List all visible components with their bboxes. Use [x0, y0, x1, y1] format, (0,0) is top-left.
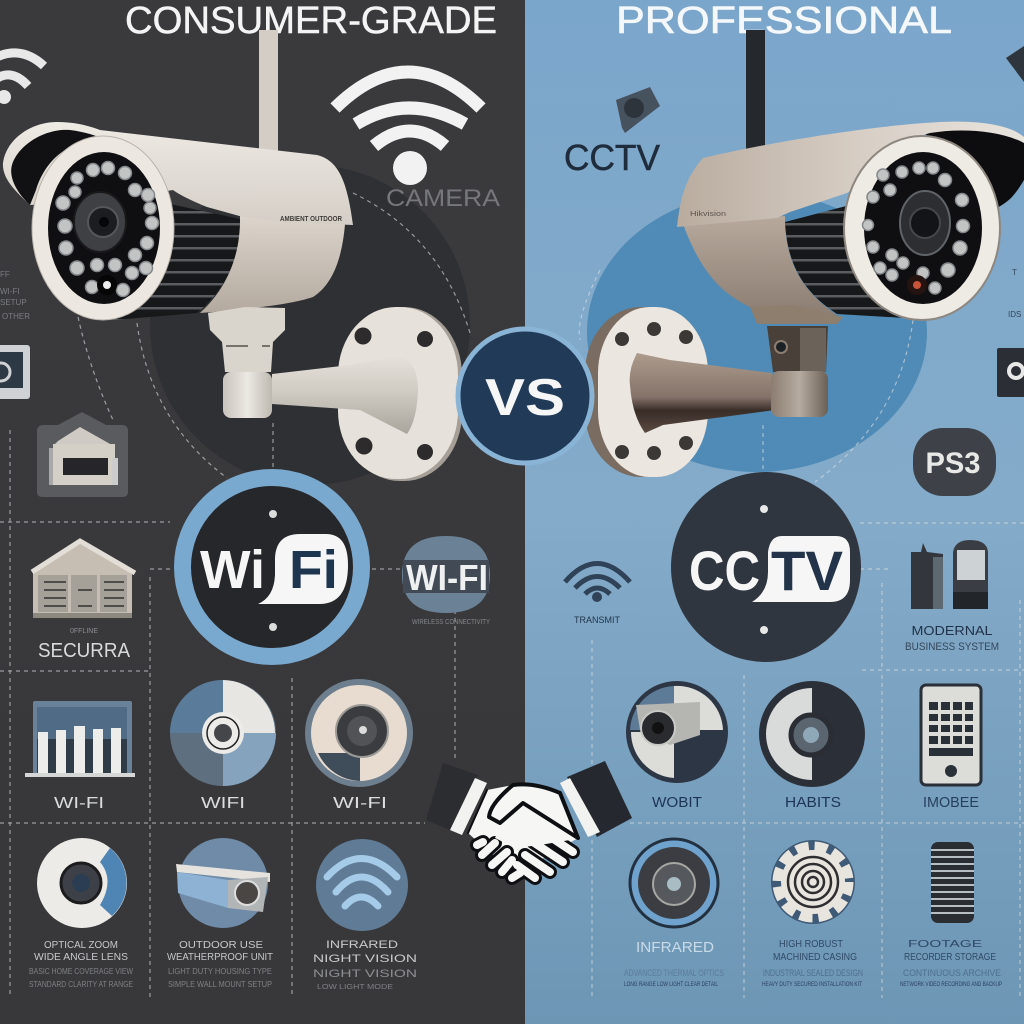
label: camera: CAMERA [386, 185, 500, 212]
right camera [677, 30, 1024, 320]
LEDs [862, 162, 970, 294]
vs badge: VS [485, 369, 565, 427]
caption [167, 940, 273, 989]
caption: INFRARED [636, 939, 714, 956]
lens [900, 191, 950, 255]
icon: wifi large [335, 72, 481, 185]
panel: cctv circle: CC [689, 539, 760, 602]
plate [342, 307, 462, 481]
badge: wi-fi [402, 536, 490, 613]
left mount [208, 307, 462, 481]
title: consumer-grade: CONSUMER-GRADE [125, 0, 497, 42]
label: wifi small right: TRANSMIT [574, 615, 620, 625]
neck [208, 307, 285, 372]
caption: INFRARED [326, 939, 398, 951]
icon: corner right [1006, 46, 1024, 82]
left text block fragments: OTHER [2, 312, 30, 321]
caption [29, 940, 133, 989]
right fingers fill [477, 832, 573, 878]
left text block fragments: FF [0, 270, 10, 279]
lens [74, 192, 126, 252]
hood interior [925, 127, 1024, 215]
label: WI-FI [333, 795, 387, 812]
label: industrial: MODERNAL [912, 623, 992, 638]
right cuff band [560, 778, 600, 837]
right hand top and thumb [489, 784, 578, 838]
right fingers outline [477, 832, 573, 878]
icon: gear lens [771, 840, 855, 924]
label: HABITS [785, 794, 841, 811]
maker text: Hikvision [690, 211, 726, 218]
maker text: AMBIENT OUTDOOR [280, 216, 342, 223]
bolts [354, 328, 372, 344]
panel: consumer-grade background [0, 0, 525, 1024]
label: security: SECURRA [38, 640, 131, 662]
icon: wifi disc [316, 839, 408, 931]
label: WIFI [201, 795, 245, 812]
title: professional: PROFESSIONAL [616, 0, 952, 42]
caption: LOW LIGHT MODE [317, 984, 393, 991]
caption: ADVANCED THERMAL OPTICS [624, 968, 724, 978]
right mount [585, 305, 843, 477]
icon: dial [170, 680, 276, 786]
panel: cctv circle [671, 472, 861, 662]
fins [113, 204, 240, 320]
caption: RECORDER STORAGE [904, 952, 996, 963]
right side fragments: IDS [1008, 310, 1021, 319]
joint [771, 371, 828, 417]
right side fragments [1008, 268, 1021, 319]
left cuff [426, 763, 478, 832]
bracket [750, 305, 843, 324]
hood [3, 122, 353, 225]
left hand [468, 785, 578, 865]
icon: small camera right [616, 87, 660, 133]
label: IMOBEE [923, 794, 979, 811]
caption: FOOTAGE [908, 939, 982, 950]
sublabel: industrial: BUSINESS SYSTEM [905, 641, 999, 653]
badge: ps3 [913, 428, 996, 496]
badge: wi-fi: WI-FI [406, 557, 488, 598]
label: cctv: CCTV [564, 137, 660, 178]
icon: servers [911, 540, 988, 609]
icon: lens [305, 679, 413, 787]
arm [630, 353, 775, 433]
caption [313, 939, 417, 991]
caption: WEATHERPROOF UNIT [167, 952, 273, 963]
hood interior [11, 130, 105, 205]
icon: camera dial [626, 681, 728, 783]
panel: cctv circle: TV [771, 539, 843, 602]
label: WOBIT [652, 794, 702, 811]
label: WI-FI [54, 795, 104, 812]
icon: small badge right [997, 348, 1024, 397]
left text block fragments: WI-FI [0, 287, 20, 296]
bolts [615, 322, 693, 460]
caption: LONG RANGE LOW LIGHT CLEAR DETAIL [624, 982, 719, 988]
hood [677, 122, 1024, 227]
icon: house large [32, 541, 135, 618]
icon: small badge left [0, 345, 30, 399]
vs badge [458, 329, 592, 463]
caption: HEAVY DUTY SECURED INSTALLATION KIT [762, 982, 862, 988]
caption [762, 939, 863, 988]
icon: wifi corner left [0, 53, 44, 104]
fins [785, 205, 905, 318]
caption: STANDARD CLARITY AT RANGE [29, 980, 133, 989]
grid: left row 1 [25, 679, 413, 812]
palm cover [495, 806, 570, 848]
caption: CONTINUOUS ARCHIVE [903, 968, 1001, 978]
left text block fragments: SETUP [0, 298, 27, 307]
caption: HIGH ROBUST [779, 939, 843, 950]
caption: NIGHT VISION [313, 968, 417, 980]
caption: OPTICAL ZOOM [44, 940, 118, 951]
caption: SIMPLE WALL MOUNT SETUP [168, 980, 272, 989]
panel: professional background [525, 0, 1024, 1024]
caption: wi-fi badge: WIRELESS CONNECTIVITY [412, 619, 490, 626]
icon: wifi small right [565, 564, 630, 602]
icon: phone [921, 685, 981, 785]
lens ring [32, 136, 174, 320]
caption: NIGHT VISION [313, 953, 417, 965]
arm [272, 356, 418, 434]
caption: WIDE ANGLE LENS [34, 952, 128, 963]
LEDs [56, 162, 158, 296]
joint [223, 372, 272, 418]
sublabel: 0FFLINE [70, 628, 98, 635]
caption [900, 939, 1002, 988]
plate [585, 307, 703, 477]
caption: BASIC HOME COVERAGE VIEW [29, 967, 133, 976]
right cuff [567, 761, 632, 837]
grid: right row 2 [624, 839, 1002, 988]
icon: white dial [37, 838, 127, 928]
icon: bar chart [25, 701, 135, 777]
background arc: left [150, 165, 470, 485]
panel: wifi circle [182, 478, 362, 656]
caption: INDUSTRIAL SEALED DESIGN [763, 968, 863, 978]
panel: wifi circle: Wi [200, 540, 265, 600]
left hand edge [468, 790, 487, 833]
icon: half dial [759, 681, 865, 787]
right side fragments: T [1012, 268, 1017, 277]
camera body [200, 216, 345, 313]
background arc: right [587, 192, 927, 472]
antenna [746, 30, 765, 150]
icon: handshake [426, 761, 632, 878]
icon: coil [931, 842, 974, 923]
caption: LIGHT DUTY HOUSING TYPE [168, 967, 272, 976]
icon: projector camera [176, 838, 270, 928]
badge: ps3: PS3 [926, 447, 980, 480]
grid: left row 2 [29, 838, 417, 991]
neck [767, 326, 828, 372]
caption: MACHINED CASING [773, 952, 857, 963]
panel: wifi circle: Fi [289, 540, 338, 600]
grid: right row 1 [626, 681, 981, 811]
icon: ring lens [630, 839, 718, 927]
caption: OUTDOOR USE [179, 940, 263, 951]
icon: house tile [37, 412, 128, 497]
left cuff band [450, 778, 487, 835]
left camera [3, 30, 353, 320]
camera body [683, 216, 837, 315]
left text block fragments [0, 270, 30, 321]
lens ring [844, 136, 1000, 320]
antenna [259, 30, 278, 155]
caption [624, 939, 724, 988]
